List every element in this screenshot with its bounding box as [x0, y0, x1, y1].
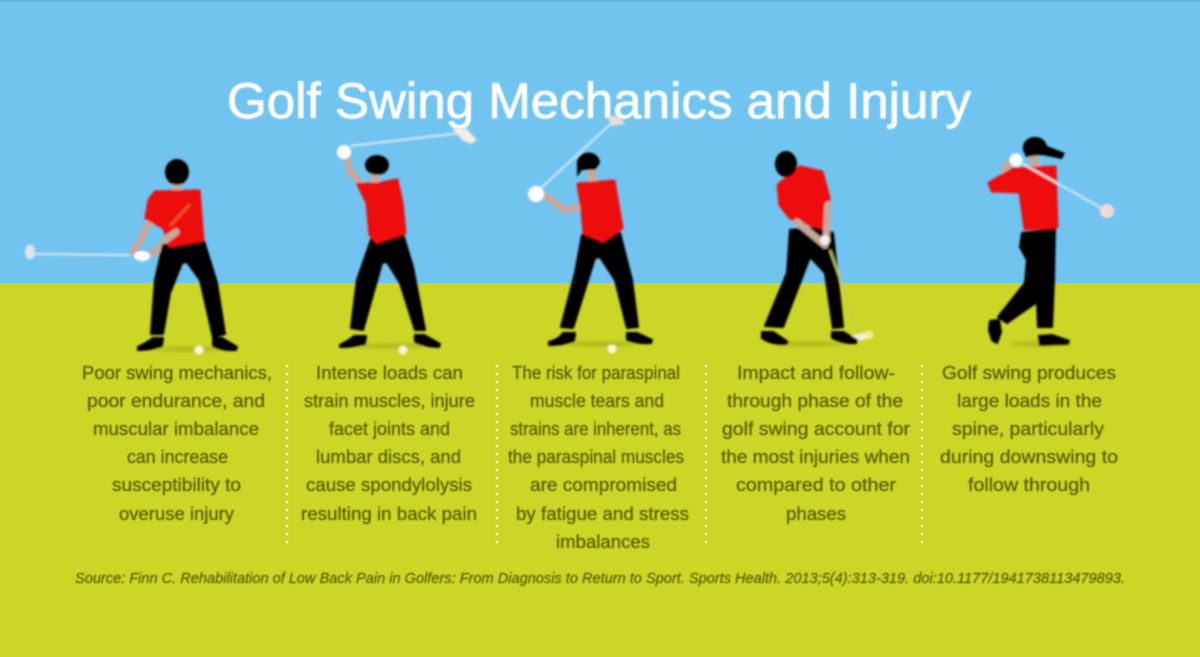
text column 5: follow through [968, 474, 1090, 495]
text column 3: muscle tears and [530, 390, 664, 411]
text column 1 [82, 362, 272, 524]
text column 2: resulting in back pain [301, 503, 477, 524]
golfer 1: address and takeaway [25, 159, 237, 354]
text column 5 [940, 362, 1118, 495]
text column 5: large loads in the [957, 390, 1102, 411]
text column 5: spine, particularly [952, 418, 1105, 439]
background: sky [0, 0, 1200, 284]
background: grass [0, 283, 1200, 657]
text column 3: are compromised [530, 474, 677, 495]
golfer 2: top of backswing [337, 128, 477, 354]
text column 1: poor endurance, and [87, 390, 265, 411]
text column 3: imbalances [556, 531, 650, 552]
text column 3: the paraspinal muscles [508, 446, 684, 467]
source citation: Source: Finn C. Rehabilitation of Low Back Pain in Golfers: From Diagnosis to Return to Sport. Sports Health. 2013;5(4):313-319. doi:10.1177/1941738113479893. [75, 571, 1125, 587]
golfer 3: downswing [528, 116, 652, 354]
text column 4: the most injuries when [721, 446, 910, 467]
text column 2: facet joints and [329, 418, 450, 439]
text column 5: Golf swing produces [942, 362, 1116, 383]
text column 4: Impact and follow- [737, 362, 895, 383]
text column 3: strains are inherent, as [510, 418, 681, 439]
text column 1: Poor swing mechanics, [82, 362, 272, 383]
column dividers [287, 366, 922, 548]
text column 1: overuse injury [119, 503, 235, 524]
text column 1: muscular imbalance [93, 418, 259, 439]
text column 2: cause spondylolysis [306, 474, 472, 495]
text column 2: strain muscles, injure [304, 390, 475, 411]
text column 2: Intense loads can [316, 362, 463, 383]
text column 4: through phase of the [727, 390, 903, 411]
text column 1: can increase [127, 446, 228, 467]
text column 4: golf swing account for [722, 418, 910, 439]
text column 2: lumbar discs, and [316, 446, 461, 467]
text column 3: The risk for paraspinal [512, 362, 680, 383]
text column 5: during downswing to [940, 446, 1118, 467]
golfer 5: follow through [989, 137, 1114, 346]
text column 4: phases [786, 503, 846, 524]
title: Golf Swing Mechanics and Injury [227, 73, 971, 129]
text column 4 [721, 362, 910, 524]
text column 4: compared to other [736, 474, 896, 495]
background: top edge strip [0, 0, 1200, 2]
text column 1: susceptibility to [112, 474, 241, 495]
text column 3: by fatigue and stress [516, 503, 689, 524]
text column 2 [301, 362, 477, 524]
text column 3 [508, 362, 689, 552]
golfer 4: impact [762, 151, 874, 346]
